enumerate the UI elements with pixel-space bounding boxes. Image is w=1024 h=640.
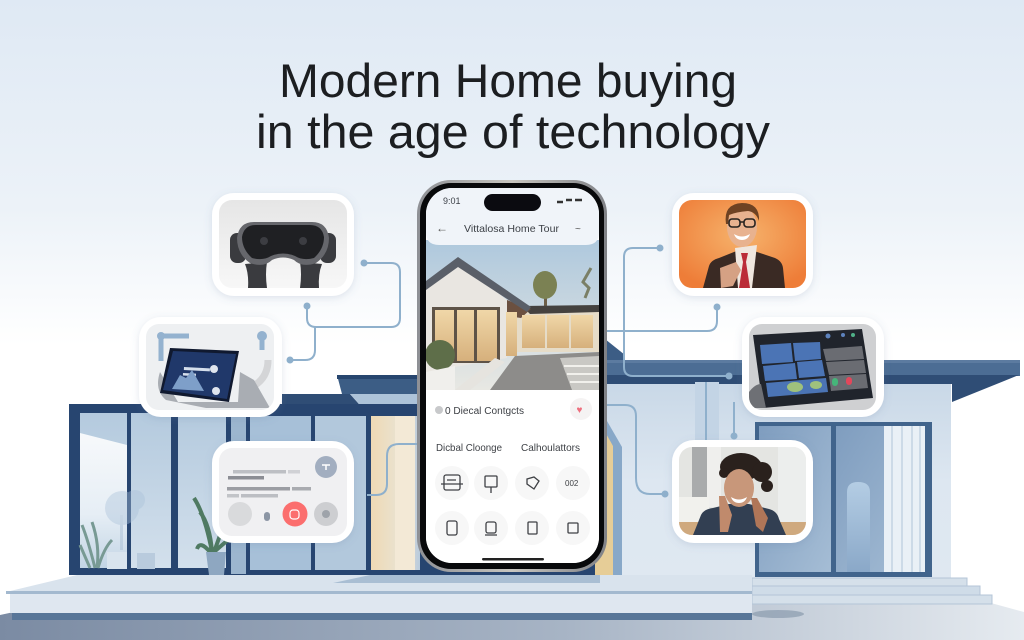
screen header: ~ [575,224,581,235]
title: in the age of technology [256,105,771,158]
phone screen [425,188,599,563]
smile [731,497,747,503]
right wing wall [607,384,951,578]
sweater [693,504,786,535]
bottom sheet: 002 [565,479,579,488]
panel: gray tiles [823,346,868,391]
panel: blue tiles [760,342,828,397]
windows [432,307,593,363]
right wing roof [607,360,1020,402]
home indicator [482,558,544,560]
card: smiling woman [672,440,813,543]
tree [533,268,591,308]
header title: Vittalosa Home Tour [464,223,559,235]
card: tablet in hand [139,317,282,417]
title: Modern Home buying [279,54,737,107]
house illustration [0,335,1024,640]
card: smart home panel [742,317,884,417]
hands [719,496,732,532]
icon: left button [228,502,252,526]
title [256,54,771,158]
planter and shrub [425,340,455,370]
back arrow: ← [436,221,448,235]
card: agent portrait [672,193,813,296]
icon: profile button [315,456,337,478]
panel base [749,384,766,408]
left planters [80,522,155,569]
icon: microphone [264,512,270,521]
icon: heart button: ♥ [576,405,582,416]
tablet [160,348,239,402]
icon: hand [158,372,270,408]
status bar: 9:01 [443,196,461,206]
screen header [426,188,599,245]
icon: timer button [314,502,338,526]
icon: arm [254,360,272,387]
card: VR headset [212,193,354,296]
upper left roof [70,375,440,414]
arched entry [590,421,622,578]
bottom sheet [426,390,599,563]
ground [0,600,1024,640]
tree reflection [105,490,145,550]
icon: pin [260,340,264,350]
background sky [0,0,1024,345]
icon grid circles [435,466,590,545]
hair [719,453,773,492]
panel device [753,329,873,408]
portrait: hand [720,262,741,288]
icon: corner pipe [161,336,189,361]
panel: status buttons [787,382,803,392]
face [724,469,754,507]
patio [490,352,599,390]
room background [692,447,707,497]
left window wall [69,404,595,575]
potted plant [194,498,228,575]
portrait: suit [703,250,785,288]
dynamic island [484,194,541,211]
bottom sheet: 0 Diecal Contgcts [445,406,524,417]
text placeholder lines [227,470,311,498]
wing wall and roof [517,312,599,352]
right wing column [695,382,719,442]
portrait: tie [739,253,750,288]
icon: red call button [282,502,308,526]
sheet labels: Dicbal Cloonge [436,442,502,454]
main platform [6,575,804,620]
sheet row: contacts [435,406,443,414]
hero house photo [425,240,599,390]
right steps [752,578,992,604]
bottom sheet: Calhoulattors [521,442,580,454]
house gable [426,262,507,372]
connector lines [286,244,738,498]
portrait: face [727,207,757,247]
icon: heart button [570,398,592,420]
gable stub beside phone [600,335,625,362]
icon grid glyphs [441,475,578,535]
card: voice call app [212,441,354,543]
phone [417,180,607,572]
right sliding door [755,422,932,577]
icon: VR headset [230,222,336,288]
